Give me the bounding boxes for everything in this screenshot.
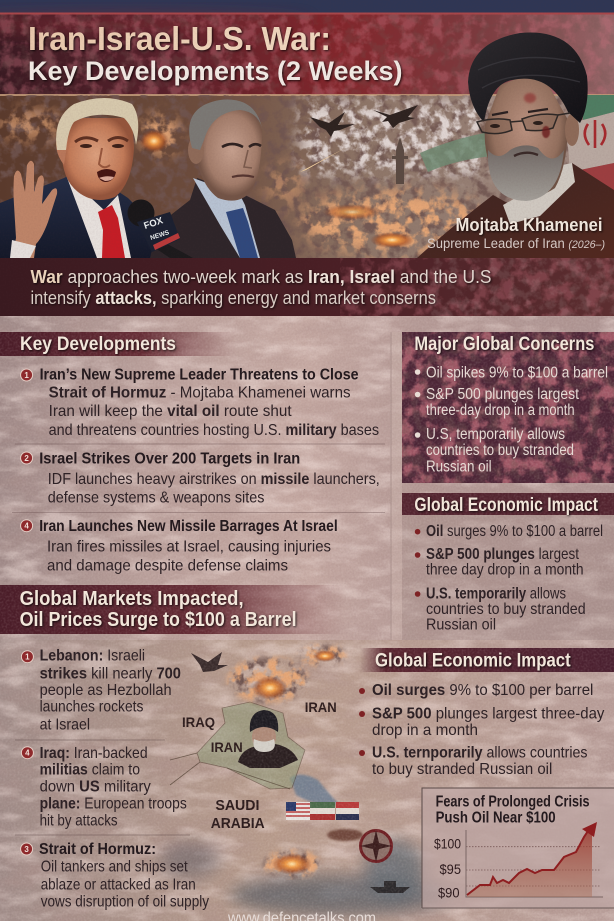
bullets [415,364,608,476]
caption: Khamenei name and title: Supreme Leader of Iran (2026–) [427,236,605,251]
bullets: three-day drop in a month [426,402,575,419]
panel: photo collage background with smoke and fire [0,95,614,258]
bullets: U.S, temporarily allows [426,426,565,443]
bullets: countries to buy stranded [426,601,586,618]
item: Lebanon: at Israel [40,716,90,733]
icon: emblem [585,120,605,148]
icon: flag of Iran [420,95,614,190]
item 2: 2 [24,454,29,463]
axis labels [434,835,461,900]
heading: global markets impacted [20,587,297,631]
item: Strait of Hormuz: ablaze or attacked as Iran [41,876,196,893]
chart: oil price line chart [422,788,614,908]
panel: key developments [12,332,391,640]
item: Strait of Hormuz: vows disruption of oil supply [41,894,209,911]
axis labels: $95 [440,861,461,877]
icon: jet on map [191,652,228,672]
figure: leader on map [238,710,298,768]
icon: raised hand [12,161,57,258]
item: Iraq: hit by attacks [40,813,118,830]
axis labels: $100 [434,835,461,851]
item: Lebanon: people as Hezbollah [40,682,172,699]
subtitle: War approaches two-week mark as Iran, Israel and the U.S [30,266,492,287]
map: highlighted territory [197,702,305,789]
map labels: IRAN [211,739,243,755]
map labels [182,699,337,832]
bullets: countries to buy stranded [426,442,574,459]
axis labels: $90 [438,884,460,900]
bullets: S&P 500 plunges largest [426,546,579,563]
map labels: IRAN [305,699,337,715]
icon: jet one [310,112,355,137]
bullets: U.S. temporarily allows [426,585,566,602]
caption: Khamenei name and title [427,215,605,251]
title: Iran-Israel-U.S. War: [28,20,331,57]
item 1: and threatens countries hosting U.S. military bases [49,422,379,439]
bullets: S&P 500 plunges largest [426,386,580,403]
icon: Fox News microphone [128,200,193,258]
title: Key Developments (2 Weeks) [28,56,402,86]
map labels: IRAQ [182,714,215,730]
item 1: Strait of Hormuz - Mojtaba Khamenei warns [49,384,351,401]
bullets [359,682,604,778]
panel: major global concerns text [414,334,608,476]
panel: header bands [0,332,614,672]
bullets: S&P 500 plunges largest three-day [372,705,604,722]
subtitle: intensify attacks, sparking energy and market conserns [30,287,436,308]
item: Strait of Hormuz: Oil tankers and ships set [41,859,188,876]
item: Lebanon: launches rockets [40,699,143,716]
item 2 [21,450,380,506]
heading: global economic impact lower: Global Economic Impact [375,651,571,672]
heading: global markets impacted: Oil Prices Surge to $100 a Barrel [20,608,297,631]
icon: Fox News microphone: NEWS [149,229,171,242]
glasses [477,113,570,134]
heading: key developments: Key Developments [20,334,176,355]
item 2: Israel Strikes Over 200 Targets in Iran [39,450,300,467]
bullets: to buy stranded Russian oil [372,761,552,778]
item 2: defense systems & weapons sites [48,489,264,506]
map labels: SAUDI [215,797,259,814]
item: Iraq: down US military [40,778,151,795]
item: Iraq: 4 [25,749,30,758]
panel: regional impacts [15,648,209,911]
title [28,20,402,86]
item 1 [21,366,379,439]
subtitle [30,266,492,308]
bullets [415,523,603,633]
bullets: three day drop in a month [426,561,584,578]
panel: global economic impact lower [359,651,604,778]
item: Iraq: plane: European troops [40,795,187,812]
item: Lebanon: strikes kill nearly 700 [40,665,181,682]
panel: map of the region [160,640,450,915]
figure: Donald Trump [0,98,160,258]
bullets: Russian oil [426,459,492,476]
item 1: 1 [24,371,29,380]
icon: Fox News microphone: FOX [143,215,165,232]
price line and arrow [467,822,597,895]
panel: major global concerns background [390,332,614,640]
bullets: Oil surges 9% to $100 per barrel [372,682,593,699]
caption: Khamenei name and title: Mojtaba Khamenei [456,215,602,235]
item 4 [21,518,338,574]
map: Persian Gulf [290,774,338,806]
map: fire bursts [226,642,364,880]
item: Strait of Hormuz: 3 [24,845,29,854]
item 4: and damage despite defense claims [47,557,288,574]
bullets: U.S. ternporarily allows countries [372,745,588,762]
item 1: Iran will keep the vital oil route shut [49,403,292,420]
chart: oil price line chart: Push Oil Near $100 [436,810,556,827]
item: Strait of Hormuz: Strait of Hormuz: [39,841,156,858]
item: Iraq: Iraq: Iran-backed [40,745,148,762]
heading: global markets impacted: Global Markets Impacted, [20,587,244,610]
icon: missile trail [300,148,345,172]
item: Iraq [21,745,187,830]
bullets: Russian oil [426,616,496,633]
item: Lebanon [21,648,181,733]
item 4: Iran Launches New Missile Barrages At Israel [39,518,338,535]
area under price line [467,827,592,897]
icon: minaret [392,137,408,184]
map labels: ARABIA [211,815,265,832]
icon: flags [286,802,359,820]
item: Lebanon: Lebanon: Israeli [40,648,145,665]
item 4: Iran fires missiles at Israel, causing injuries [47,539,331,556]
item 2: IDF launches heavy airstrikes on missile launchers, [48,471,380,488]
item: Lebanon: 1 [25,653,30,662]
item: Iraq: militias claim to [40,762,140,779]
bullets: drop in a month [372,722,478,739]
icon: jet two [373,105,418,128]
item: Strait of Hormuz [21,841,209,911]
item 1: Iran’s New Supreme Leader Threatens to Close [40,366,359,383]
icon: ship [370,881,410,893]
item 4: 4 [24,522,29,531]
figure: Benjamin Netanyahu [150,100,296,258]
panel: global economic impact upper [414,495,603,633]
icon: compass [360,830,392,862]
figure: Mojtaba Khamenei portrait [417,33,614,258]
